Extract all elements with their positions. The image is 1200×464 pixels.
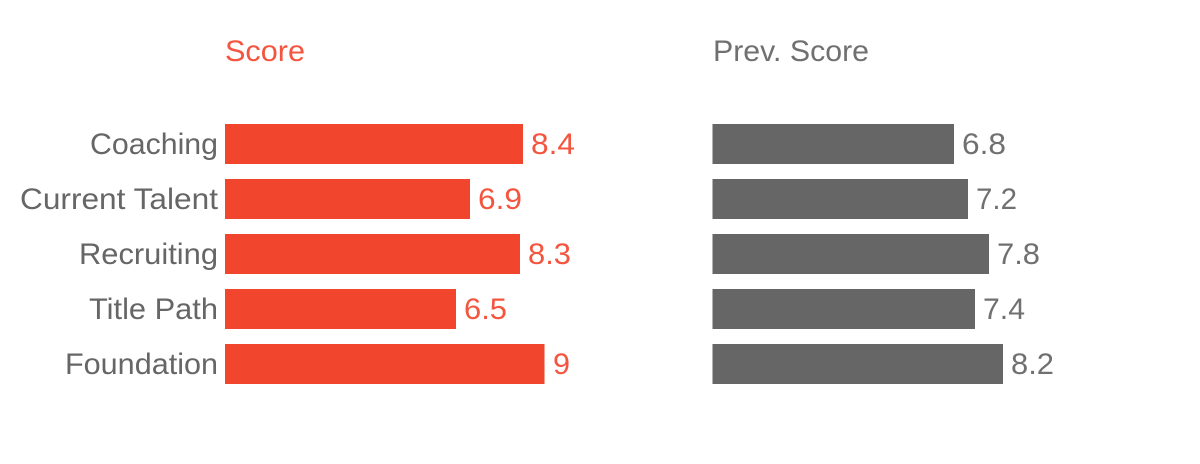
score values: 6.9 — [478, 183, 522, 216]
score values: 9 — [553, 348, 570, 381]
category labels: Title Path — [89, 293, 218, 326]
score values: 8.4 — [531, 128, 575, 161]
category labels: Foundation — [65, 348, 218, 381]
previous score values — [962, 128, 1054, 381]
previous score values: 7.2 — [976, 183, 1017, 216]
category labels: Current Talent — [20, 183, 219, 216]
heading: Score: Score — [225, 35, 305, 68]
score values: 8.3 — [528, 238, 571, 271]
score values — [464, 128, 575, 381]
panel: score bars — [225, 124, 544, 384]
panel: previous score bars — [712, 124, 1003, 384]
heading: Prev. Score: Prev. Score — [713, 35, 869, 68]
previous score values: 7.8 — [997, 238, 1040, 271]
previous score values: 7.4 — [983, 293, 1025, 326]
previous score values: 8.2 — [1011, 348, 1054, 381]
category labels: Recruiting — [79, 238, 218, 271]
category labels — [20, 128, 219, 381]
previous score values: 6.8 — [962, 128, 1006, 161]
category labels: Coaching — [90, 128, 218, 161]
score values: 6.5 — [464, 293, 507, 326]
